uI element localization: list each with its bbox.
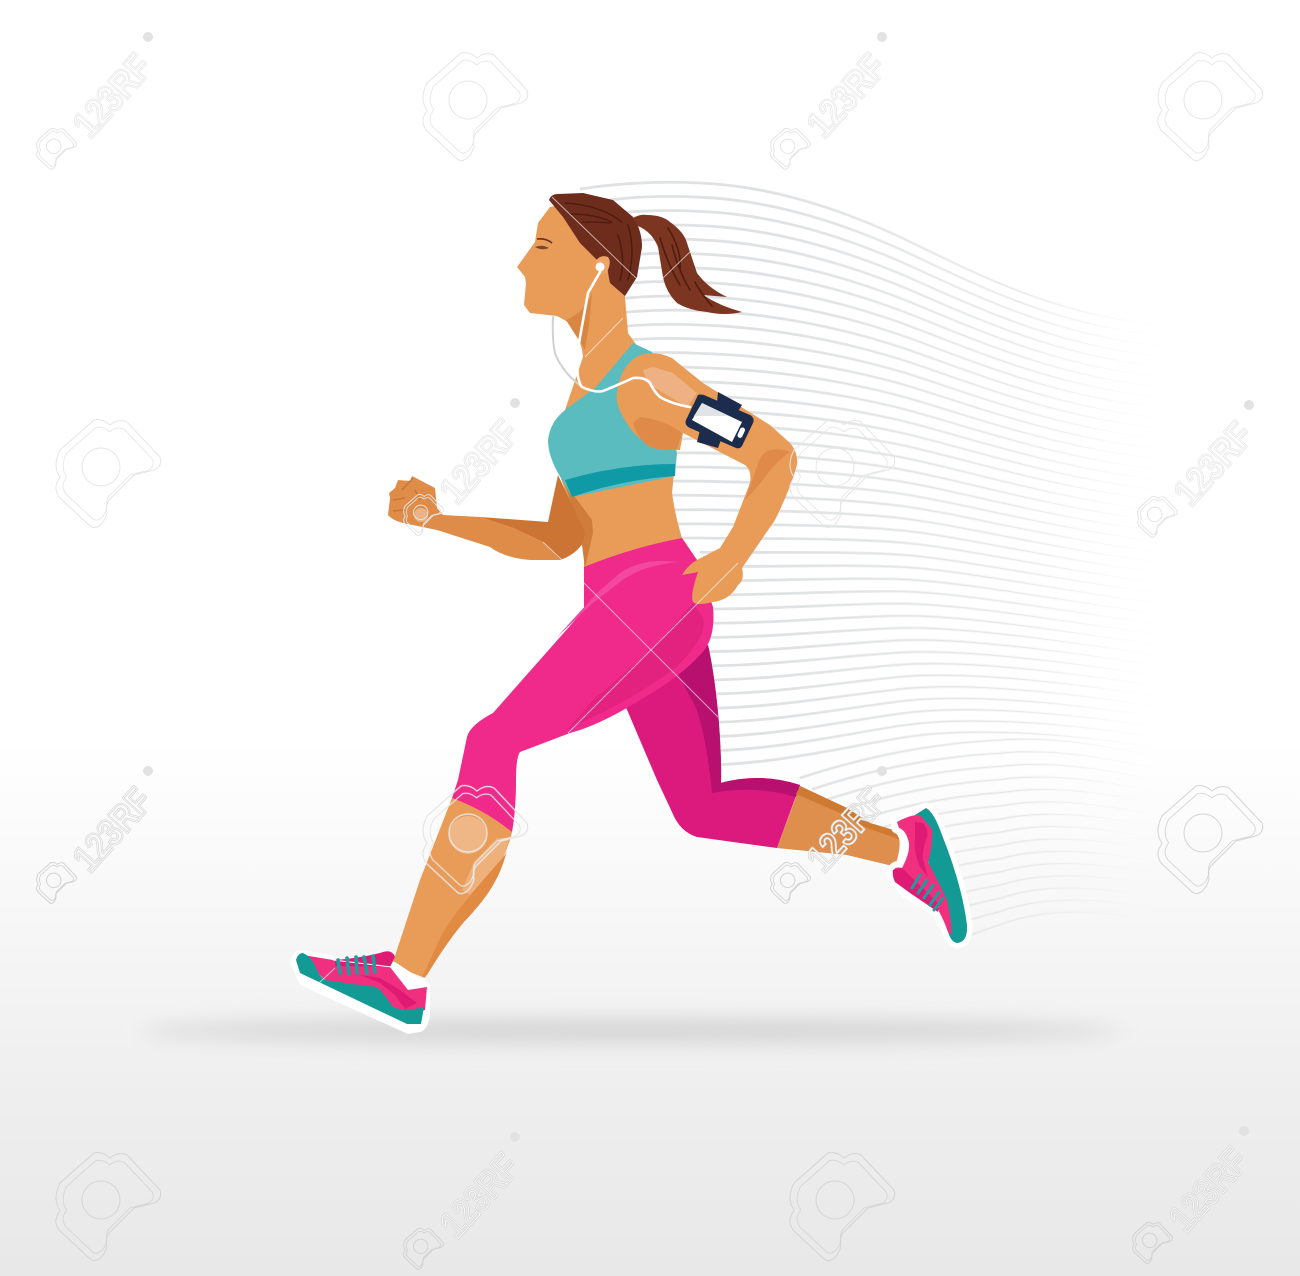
- 123RF watermark logos, lower area: [37, 766, 1257, 1269]
- back leg: calf: [777, 786, 905, 867]
- watermark highlight on the knee: [423, 786, 528, 895]
- large watermark stamps, upper area: [56, 53, 1263, 528]
- speed lines flowing behind the runner: [580, 182, 1180, 936]
- ear: [595, 256, 610, 275]
- ponytail: [633, 215, 742, 314]
- shoe laces: [912, 875, 943, 910]
- rear arm with hand on hip: [617, 353, 797, 604]
- neck and face: [517, 200, 640, 420]
- back shoe: [893, 808, 967, 943]
- hair: [549, 193, 642, 296]
- front shoe: [290, 950, 430, 1034]
- back leg: leggings: [625, 645, 800, 848]
- thin watermark diagonals across the figure: [319, 197, 738, 983]
- front arm: [388, 475, 585, 560]
- front leg skin: [392, 798, 512, 978]
- smartphone armband: [686, 392, 754, 448]
- watermark dot on fist: [414, 508, 428, 522]
- eyebrow and eye: [535, 239, 552, 249]
- leggings shading: [567, 603, 704, 730]
- large watermark stamps, lower area: [56, 786, 1263, 1261]
- front shoe laces: [338, 956, 375, 974]
- torso: [558, 462, 697, 600]
- ground shadow: [140, 1019, 1120, 1043]
- runner figure: [290, 193, 967, 1034]
- 123RF watermark logos, upper area: [37, 32, 1262, 537]
- sports bra: [548, 343, 677, 497]
- earphone wires: [553, 262, 690, 407]
- back leg thigh and front leg leggings: [452, 538, 713, 832]
- leggings highlight: [557, 561, 680, 637]
- sock: [390, 963, 428, 993]
